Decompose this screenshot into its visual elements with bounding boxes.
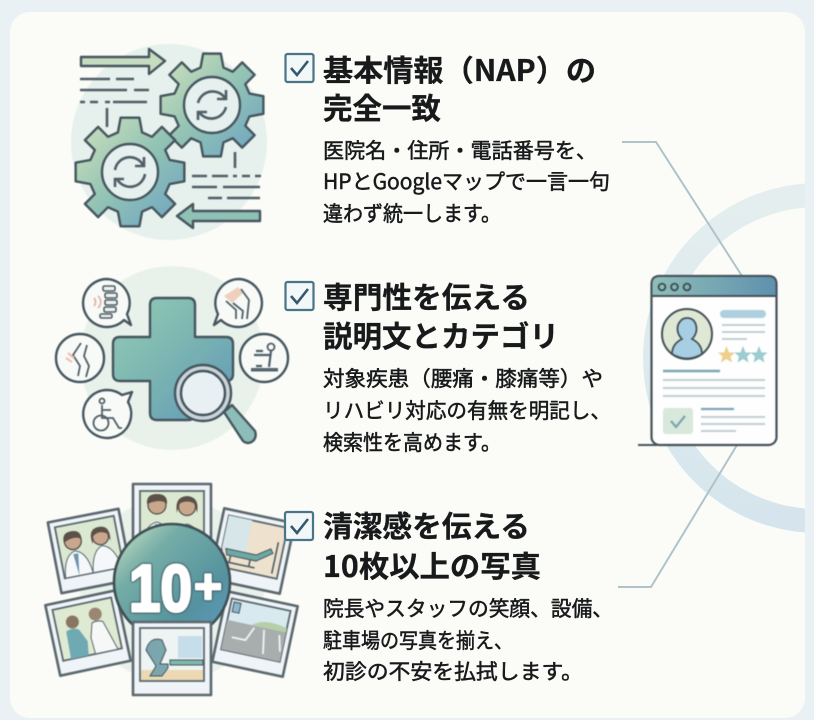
- body 2: 対象疾患（腰痛・膝痛等）や: [323, 363, 603, 393]
- body 1: 違わず統一します。: [323, 198, 501, 228]
- body 1: HPとGoogleマップで一言一句: [323, 166, 610, 196]
- body 3: [323, 593, 613, 686]
- bubble: rehabilitation: [240, 334, 288, 382]
- bubble: wheelchair: [83, 390, 132, 438]
- heading 1: [323, 48, 596, 128]
- panel: item 2 expertise: [286, 275, 611, 457]
- star rating: [718, 346, 768, 362]
- profile avatar: [662, 309, 712, 359]
- panel: item 1 basic information: [286, 48, 610, 228]
- body 3: 駐車場の写真を揃え、: [323, 625, 513, 655]
- body 1: [323, 135, 610, 228]
- photo: therapy: [45, 590, 131, 676]
- check tile: [663, 408, 693, 434]
- heading 2: 説明文とカテゴリ: [323, 314, 559, 356]
- heading 3: 清潔感を伝える: [323, 504, 530, 546]
- photo: staff pair top: [133, 484, 211, 574]
- badge: 10+: 10: [129, 551, 192, 625]
- decorative ring: [655, 195, 814, 521]
- badge: 10+: +: [194, 561, 222, 614]
- body 2: リハビリ対応の有無を明記し、: [323, 395, 611, 425]
- icon: medical cross with magnifier: [56, 266, 288, 450]
- heading 3: 10枚以上の写真: [323, 544, 541, 586]
- body 3: 初診の不安を払拭します。: [323, 656, 583, 686]
- body 2: [323, 363, 611, 457]
- icon: web profile page: [638, 276, 776, 445]
- bubble: spine: [83, 279, 131, 327]
- heading 1: 完全一致: [323, 86, 441, 128]
- heading 3: [323, 504, 541, 586]
- photo: treatment room: [209, 508, 295, 594]
- body 2: 検索性を高めます。: [323, 427, 501, 457]
- checkbox 2: [286, 282, 314, 310]
- photo: parking lot: [212, 591, 298, 677]
- icon: ten plus photos: [45, 484, 298, 695]
- checkbox 3: [285, 512, 313, 540]
- body 3: 院長やスタッフの笑顔、設備、: [323, 593, 613, 623]
- heading 1: 基本情報（NAP）の: [323, 48, 596, 90]
- heading 2: 専門性を伝える: [323, 275, 530, 317]
- badge: 10+: [114, 524, 230, 640]
- connector lines: [618, 142, 742, 587]
- body 1: 医院名・住所・電話番号を、: [323, 135, 597, 165]
- heading 2: [323, 275, 559, 356]
- photo: staff pair left: [48, 509, 132, 593]
- icon: gears and sync arrows: [71, 44, 267, 240]
- panel: item 3 photos: [285, 504, 613, 686]
- bubble: knee: [214, 279, 262, 327]
- checkbox 1: [286, 54, 314, 82]
- bubble: leg joint: [56, 334, 104, 382]
- photo: equipment: [133, 622, 211, 695]
